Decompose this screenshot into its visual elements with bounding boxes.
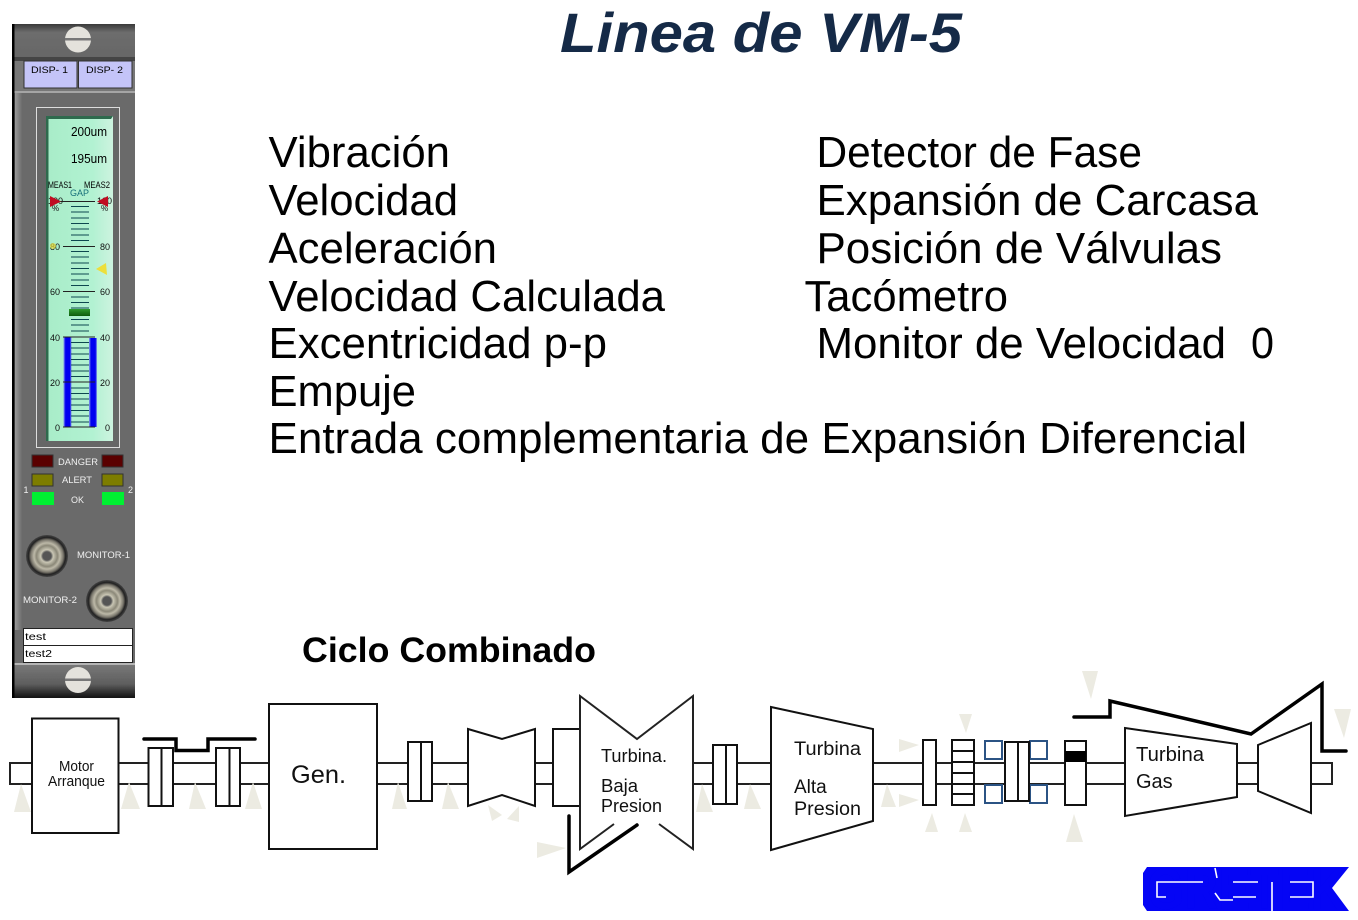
scale numbers: 0: [55, 423, 60, 433]
motor: Motor Arranque: Arranque: [48, 774, 105, 790]
connector: monitor 2: MONITOR-2: [23, 595, 77, 605]
scale numbers: 100: [48, 196, 63, 206]
diagram: combined-cycle shaft line: [10, 671, 1351, 872]
status LEDs: 2: [128, 485, 133, 495]
tag: test2: [24, 646, 132, 662]
status LEDs: [24, 455, 133, 505]
connector: monitor 1: MONITOR-1: [77, 550, 130, 560]
measurement list: right column: Tacómetro: [804, 272, 1008, 321]
bar: channel 1 level: [64, 337, 72, 427]
title: Linea de VM-5: [560, 1, 963, 64]
measurement list: right column: Posición de Válvulas: [816, 224, 1222, 273]
tag: test: [24, 628, 132, 646]
thrust collar: [1065, 741, 1086, 805]
measurement list: left column: Entrada complementaria de Expansión Diferencial: [268, 414, 1247, 463]
marker: red danger left: [50, 196, 61, 207]
channel labels: GAP: [70, 188, 89, 198]
scale numbers: 60: [100, 287, 110, 297]
scale numbers: 100: [97, 196, 112, 206]
coupling 5: [1005, 742, 1029, 801]
proximity probes: [985, 741, 1047, 803]
disc: [923, 740, 936, 805]
measurement list: right column: Monitor de Velocidad: [816, 319, 1226, 368]
measurement list: left column: [268, 128, 1247, 463]
status LEDs: 1: [24, 485, 29, 495]
coupling 1: [148, 748, 173, 806]
exciter section: [468, 729, 535, 806]
measurement list: right column: Expansión de Carcasa: [816, 176, 1259, 225]
scale numbers: %: [101, 204, 108, 213]
turbine: Gas: Turbina: [1136, 744, 1205, 766]
measurement list: left column: Aceleración: [268, 224, 497, 273]
marker: green setpoint: [69, 309, 90, 316]
toothed wheel: [952, 740, 974, 805]
thick path: gas turbine casing line: [1074, 684, 1346, 751]
sensor triangles: [14, 671, 1351, 858]
tag: test: test: [25, 631, 46, 643]
turbine: Baja Presion: Presion: [601, 795, 662, 816]
heading: Ciclo Combinado: Ciclo Combinado: [302, 631, 596, 670]
compressor: [1258, 723, 1311, 813]
coupling 4: [713, 745, 737, 804]
marker: yellow dot: [50, 243, 56, 249]
turbine: Baja Presion: [580, 696, 693, 849]
turbine: Alta Presion: [771, 707, 873, 850]
readout: 200um: 200um: [71, 124, 107, 139]
marker: yellow pointer: [96, 263, 107, 275]
shaft: [10, 763, 1332, 784]
scale numbers: 0: [105, 423, 110, 433]
channel labels: MEAS2: [84, 180, 110, 190]
scale numbers: 20: [100, 378, 110, 388]
button: DISP-2: [78, 61, 132, 88]
channel labels: [48, 180, 110, 198]
measurement list: left column: Excentricidad p-p: [268, 319, 607, 368]
turbine inlet box: [553, 729, 580, 806]
turbine: Alta Presion: Presion: [794, 799, 861, 820]
scale numbers: 80: [50, 242, 60, 252]
turbine: Alta Presion: Alta: [794, 777, 827, 798]
turbine: Alta Presion: Turbina: [794, 739, 861, 760]
measurement list: left column: Empuje: [268, 367, 416, 416]
turbine: Baja Presion: Turbina.: [601, 745, 667, 766]
panel bottom footer: [14, 663, 135, 698]
coupling 3: [408, 742, 432, 801]
thick path: LP casing line: [569, 816, 637, 872]
generator: Gen.: [291, 761, 346, 789]
status LEDs: DANGER: [58, 457, 99, 467]
status LEDs: ALERT: [62, 475, 93, 485]
measurement list: right column: [804, 128, 1274, 368]
measurement list: left column: Vibración: [268, 128, 450, 177]
readout: 195um: 195um: [71, 151, 107, 166]
button: DISP-1: [24, 61, 77, 88]
measurement list: left column: Velocidad Calculada: [268, 272, 666, 321]
gauge display: [36, 108, 120, 448]
scale numbers: 60: [50, 287, 60, 297]
marker: red danger right: [97, 196, 108, 207]
scale numbers: %: [52, 204, 59, 213]
motor: Motor Arranque: Motor: [59, 759, 94, 775]
coupling 2: [216, 748, 240, 806]
scale ticks: [60, 202, 95, 427]
turbine: Baja Presion: Baja: [601, 775, 639, 796]
scale numbers: 80: [100, 242, 110, 252]
measurement list: left column: Velocidad: [268, 176, 458, 225]
panel top header: [14, 24, 135, 93]
thick path: casing line: [144, 739, 255, 750]
button: DISP-2: DISP- 2: [86, 65, 123, 75]
measurement list: right column: Detector de Fase: [816, 128, 1142, 177]
tag: test2: test2: [25, 648, 52, 660]
motor: Motor Arranque: [32, 718, 118, 833]
turbine: Gas: [1125, 728, 1237, 816]
panel: VM-5 monitor module: [12, 24, 135, 698]
scale numbers: 40: [100, 333, 110, 343]
channel labels: MEAS1: [48, 180, 72, 190]
turbine: Gas: Gas: [1136, 771, 1173, 793]
bar: channel 2 level: [89, 338, 97, 427]
scale numbers: [48, 196, 112, 433]
generator: [269, 704, 377, 849]
status LEDs: OK: [71, 495, 84, 505]
connector: monitor 1: [26, 535, 130, 577]
scale numbers: 20: [50, 378, 60, 388]
connector: monitor 2: [23, 580, 128, 622]
button: DISP-1: DISP- 1: [31, 65, 68, 75]
measurement list: right column: 0: [1251, 319, 1274, 368]
scale numbers: 40: [50, 333, 60, 343]
